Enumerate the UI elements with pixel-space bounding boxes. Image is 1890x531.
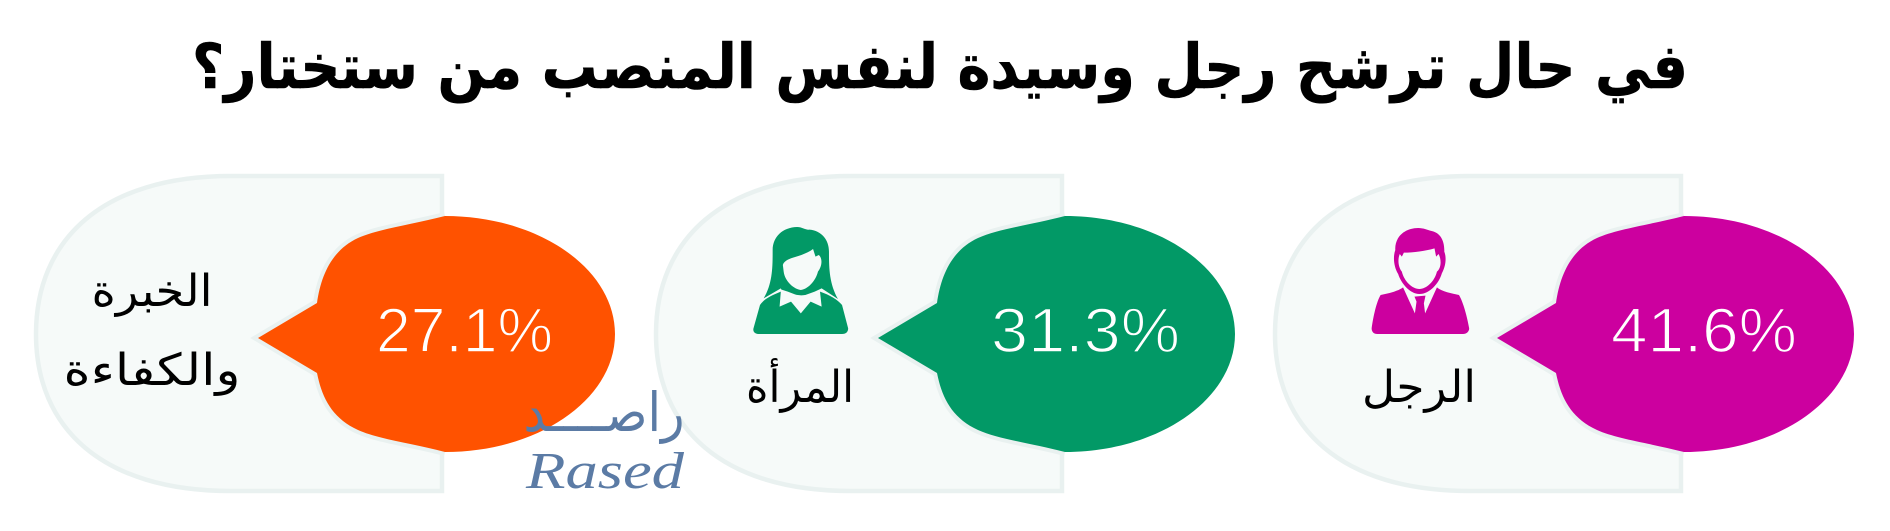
logo latin wordmark: Rased <box>525 443 685 500</box>
label: competence: والكفاءة <box>64 345 240 396</box>
panel background <box>1275 176 1681 491</box>
value 41.6%: 41.6% <box>1611 296 1797 366</box>
label: man: الرجل <box>1362 362 1476 413</box>
logo arabic wordmark: راصــــد <box>524 381 684 444</box>
logo: Rased <box>524 381 685 500</box>
panel: man 41.6% <box>1275 176 1854 491</box>
speech bubble <box>1497 216 1854 452</box>
value 27.1%: 27.1% <box>376 296 553 366</box>
icon: man <box>1372 228 1469 334</box>
title: في حال ترشح رجل وسيدة لنفس المنصب من ستختار؟ <box>192 30 1688 103</box>
value 31.3%: 31.3% <box>991 296 1180 366</box>
panel: experience and competence 27.1% <box>36 176 615 491</box>
label: woman: المرأة <box>746 358 854 413</box>
panel background <box>656 176 1062 491</box>
speech bubble <box>878 216 1235 452</box>
label: experience: الخبرة <box>92 266 212 317</box>
icon: woman <box>753 227 848 334</box>
panel: woman 31.3% <box>656 176 1235 491</box>
panel background <box>36 176 442 491</box>
speech bubble <box>258 216 615 452</box>
